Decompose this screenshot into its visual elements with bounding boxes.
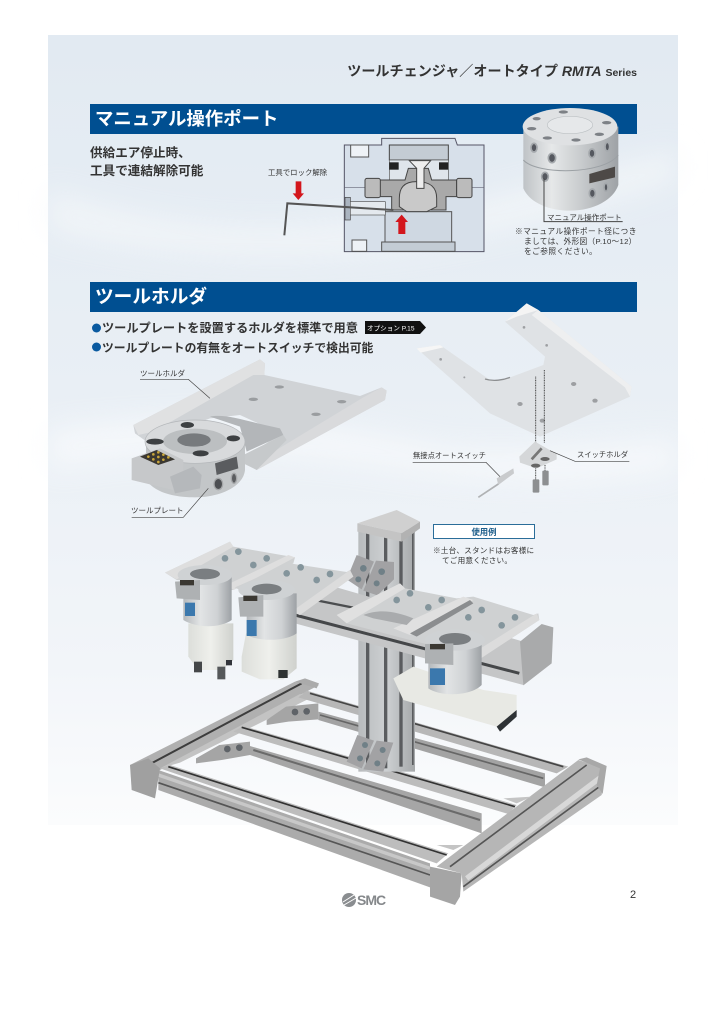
label: tool plate: ツールプレート [131, 506, 184, 515]
heading: manual port [90, 104, 637, 134]
unit 3: white base module [393, 629, 517, 732]
text block: manual release description [90, 145, 204, 178]
gussets [347, 555, 394, 772]
label: tool holder: ツールホルダ [140, 368, 185, 378]
label: switch holder: スイッチホルダ [577, 450, 628, 459]
heading: tool holder [90, 282, 637, 312]
logo: SMC [342, 892, 386, 908]
badge: option page [365, 321, 426, 334]
text block: manual port note: をご参照ください。 [524, 246, 597, 256]
heading: tool holder: ツールホルダ [95, 286, 207, 307]
label: lock release with tool: 工具でロック解除 [268, 168, 328, 177]
label: manual port: マニュアル操作ポート [547, 212, 622, 222]
holder plates [165, 542, 295, 590]
text block: manual port note: ましては、外形図（P.10～12） [524, 236, 637, 246]
panel: page background [48, 35, 678, 825]
text block: usage note: ※土台、スタンドはお客様に [433, 545, 534, 555]
unit 1: gripper [175, 565, 233, 679]
icon: RMTA unit photograph [523, 108, 623, 222]
base frame [130, 678, 607, 905]
text block: bullets: ツールプレートを設置するホルダを標準で用意 [102, 320, 358, 335]
text block: usage note [433, 545, 534, 565]
column [357, 510, 420, 772]
heading: manual port: マニュアル操作ポート [95, 108, 278, 129]
title: ツールチェンジャ／オートタイプ RMTA Series [347, 63, 637, 79]
text block: manual port note: ※マニュアル操作ポート径につき [515, 226, 637, 236]
beam [295, 587, 523, 685]
logo: SMC: SMC [357, 892, 386, 908]
text block: bullets [92, 320, 374, 355]
unit 2: gripper [238, 580, 297, 679]
illustration: usage example assembly [130, 510, 607, 905]
illustration: exploded tool holder and switch [413, 303, 632, 497]
text block: bullets: ツールプレートの有無をオートスイッチで検出可能 [102, 341, 374, 355]
illustration: tool holder with tool plate [132, 359, 387, 517]
chart: cross-section diagram with hex key [284, 138, 484, 252]
badge: option page: オプション P.15 [367, 324, 415, 332]
label box: usage example [434, 524, 534, 538]
text block: manual release description: 工具で連結解除可能 [90, 163, 204, 178]
text block: usage note: てご用意ください。 [442, 555, 512, 565]
page number: 2 [630, 889, 636, 901]
label: solid state auto switch: 無接点オートスイッチ [413, 451, 486, 460]
text block: manual port note [515, 226, 637, 256]
text block: manual release description: 供給エア停止時、 [90, 145, 191, 160]
label box: usage example: 使用例 [471, 527, 497, 537]
